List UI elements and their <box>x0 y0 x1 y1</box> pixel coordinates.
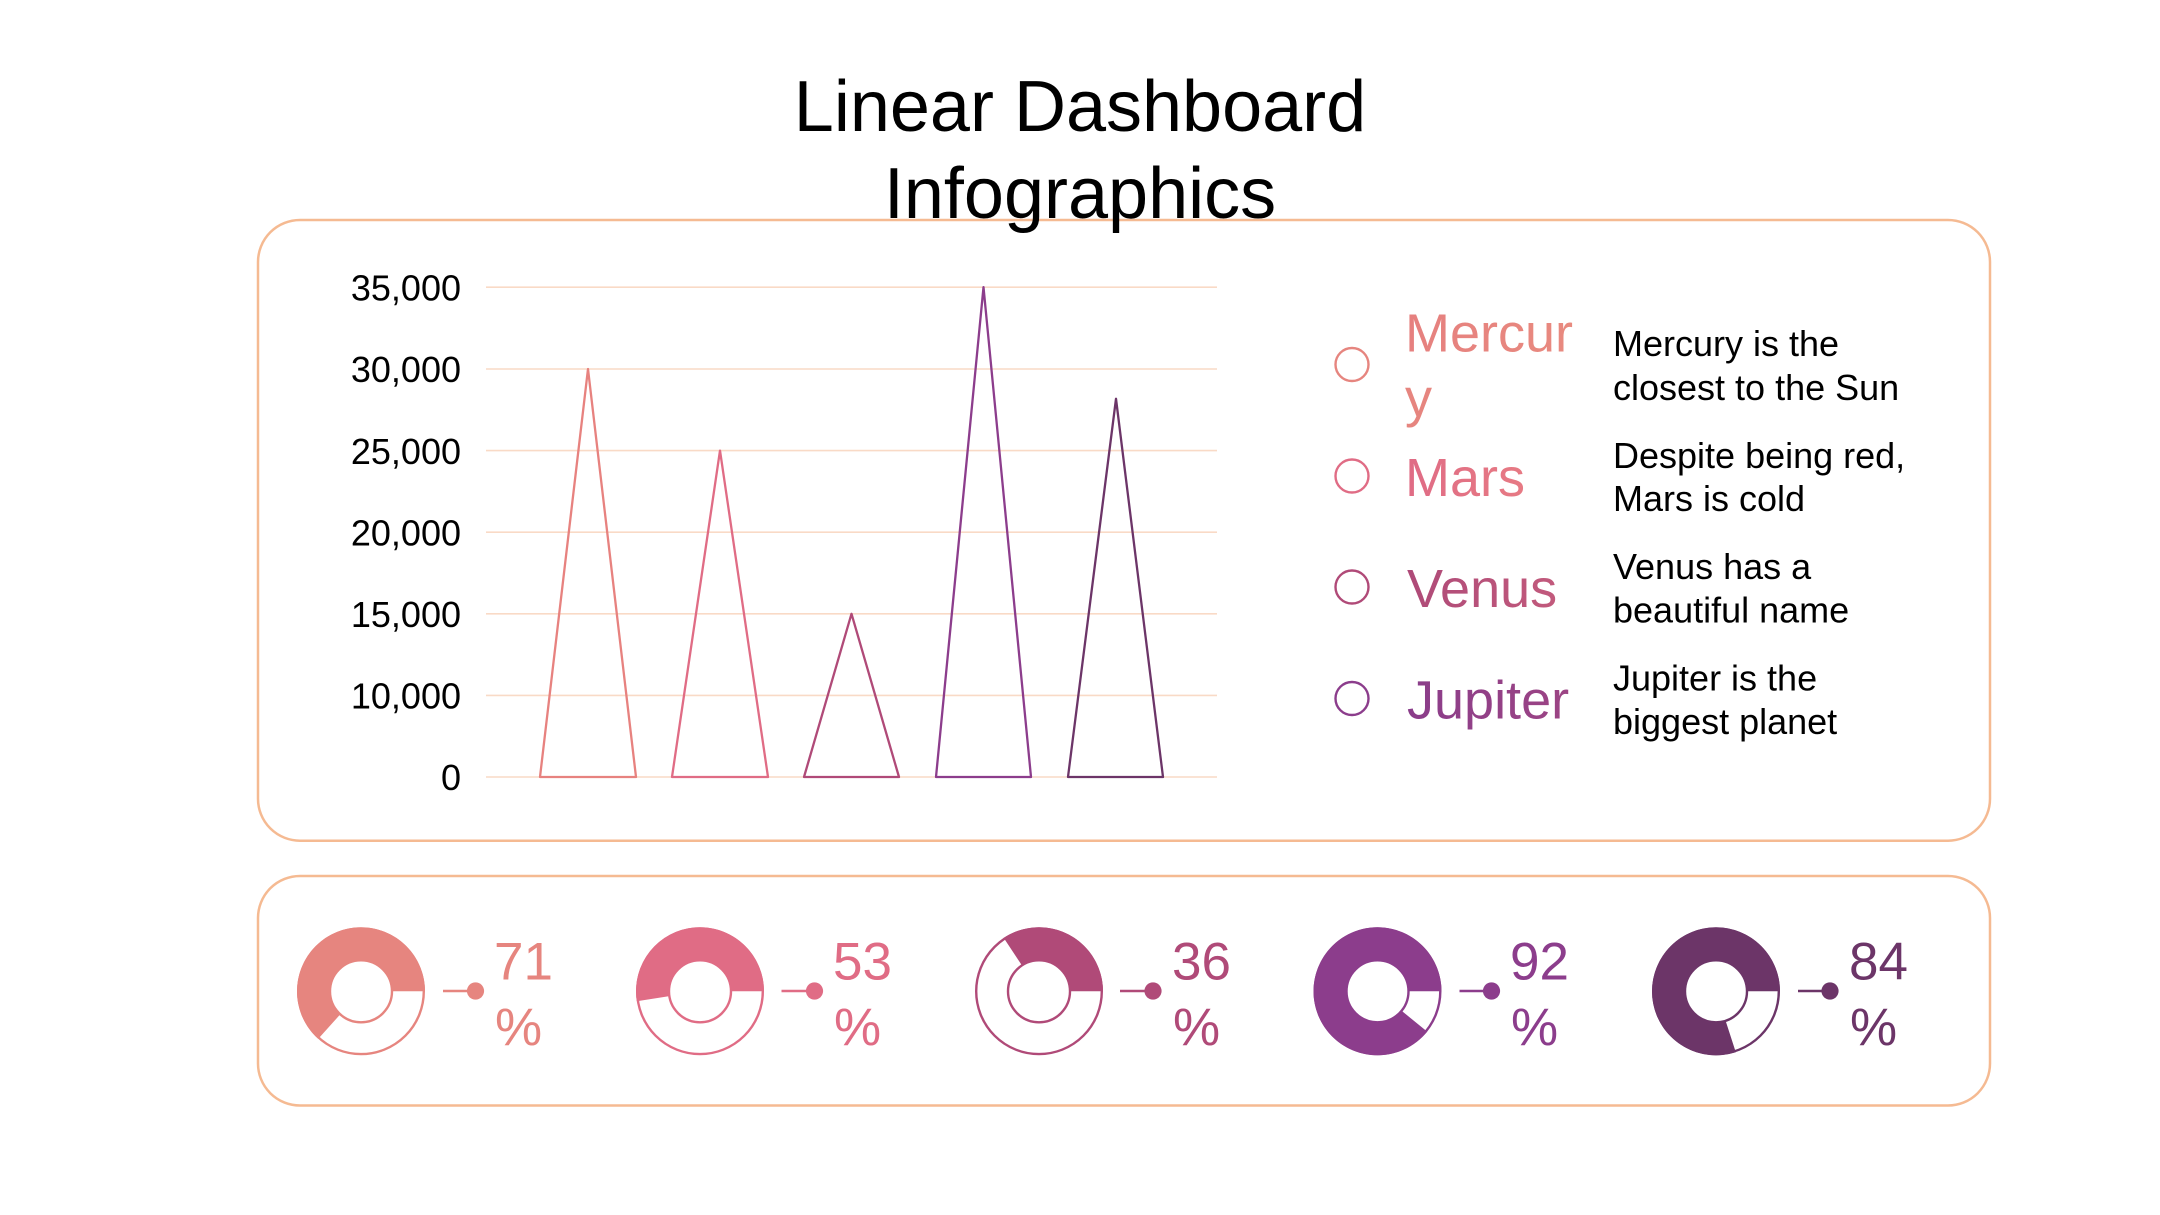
panel: donut row <box>258 876 1990 1106</box>
triangle columns <box>540 287 1163 777</box>
panel: chart and legend <box>258 220 1990 841</box>
donut stat: 36%: 36 <box>1172 932 1231 992</box>
legend item: Jupiter: Jupiter <box>1407 670 1569 730</box>
donut stat: 84%: % <box>1850 998 1897 1057</box>
donut stat: 71% <box>297 927 553 1057</box>
donut stat: 53%: % <box>834 998 881 1057</box>
donut stat: 71%: % <box>495 998 542 1057</box>
legend item: Venus: Venus has a <box>1613 546 1812 587</box>
legend item: Jupiter <box>1336 658 1837 742</box>
legend item: Jupiter: biggest planet <box>1613 701 1837 742</box>
legend item: Mercury: closest to the Sun <box>1613 367 1899 408</box>
y axis labels: 25,000 <box>351 431 461 472</box>
legend item: Mercury: Mercury is the <box>1613 323 1839 364</box>
title: Linear Dashboard <box>794 67 1366 147</box>
donut stat: 92%: 92 <box>1510 932 1569 992</box>
y axis labels: 20,000 <box>351 512 461 554</box>
y axis labels: 10,000 <box>351 676 461 717</box>
legend item: Mercury: y <box>1405 368 1432 428</box>
donut stat: 36% <box>976 927 1231 1057</box>
legend item: Mars: Mars is cold <box>1613 478 1805 519</box>
y axis labels: 15,000 <box>351 594 461 635</box>
donut stat: 84%: 84 <box>1849 932 1908 992</box>
y axis labels <box>351 268 461 798</box>
y axis labels: 35,000 <box>351 268 461 308</box>
y axis labels: 30,000 <box>351 349 461 390</box>
chart grid lines <box>486 287 1217 777</box>
legend item: Venus: Venus <box>1407 559 1557 619</box>
donut stat: 71%: 71 <box>494 932 553 992</box>
legend item: Mercury <box>1336 304 1899 428</box>
donut stat: 92% <box>1314 927 1569 1057</box>
legend <box>1336 304 1905 742</box>
y axis labels: 0 <box>441 757 461 798</box>
legend item: Mars: Despite being red, <box>1613 435 1905 476</box>
legend item: Venus: beautiful name <box>1613 590 1849 630</box>
donut stat: 92%: % <box>1511 998 1558 1057</box>
donut stat: 84% <box>1652 927 1908 1057</box>
legend item: Mercury: Mercur <box>1405 304 1573 364</box>
chart: triangle columns <box>351 268 1217 798</box>
title <box>794 67 1366 234</box>
legend item: Mars: Mars <box>1405 448 1525 508</box>
legend item: Mars <box>1336 435 1905 519</box>
legend item: Venus <box>1336 546 1849 630</box>
donut stat: 53% <box>636 927 892 1057</box>
title: Infographics <box>884 154 1276 234</box>
donut stat: 53%: 53 <box>833 932 892 992</box>
legend item: Jupiter: Jupiter is the <box>1613 658 1817 698</box>
donut stat: 36%: % <box>1173 998 1220 1057</box>
